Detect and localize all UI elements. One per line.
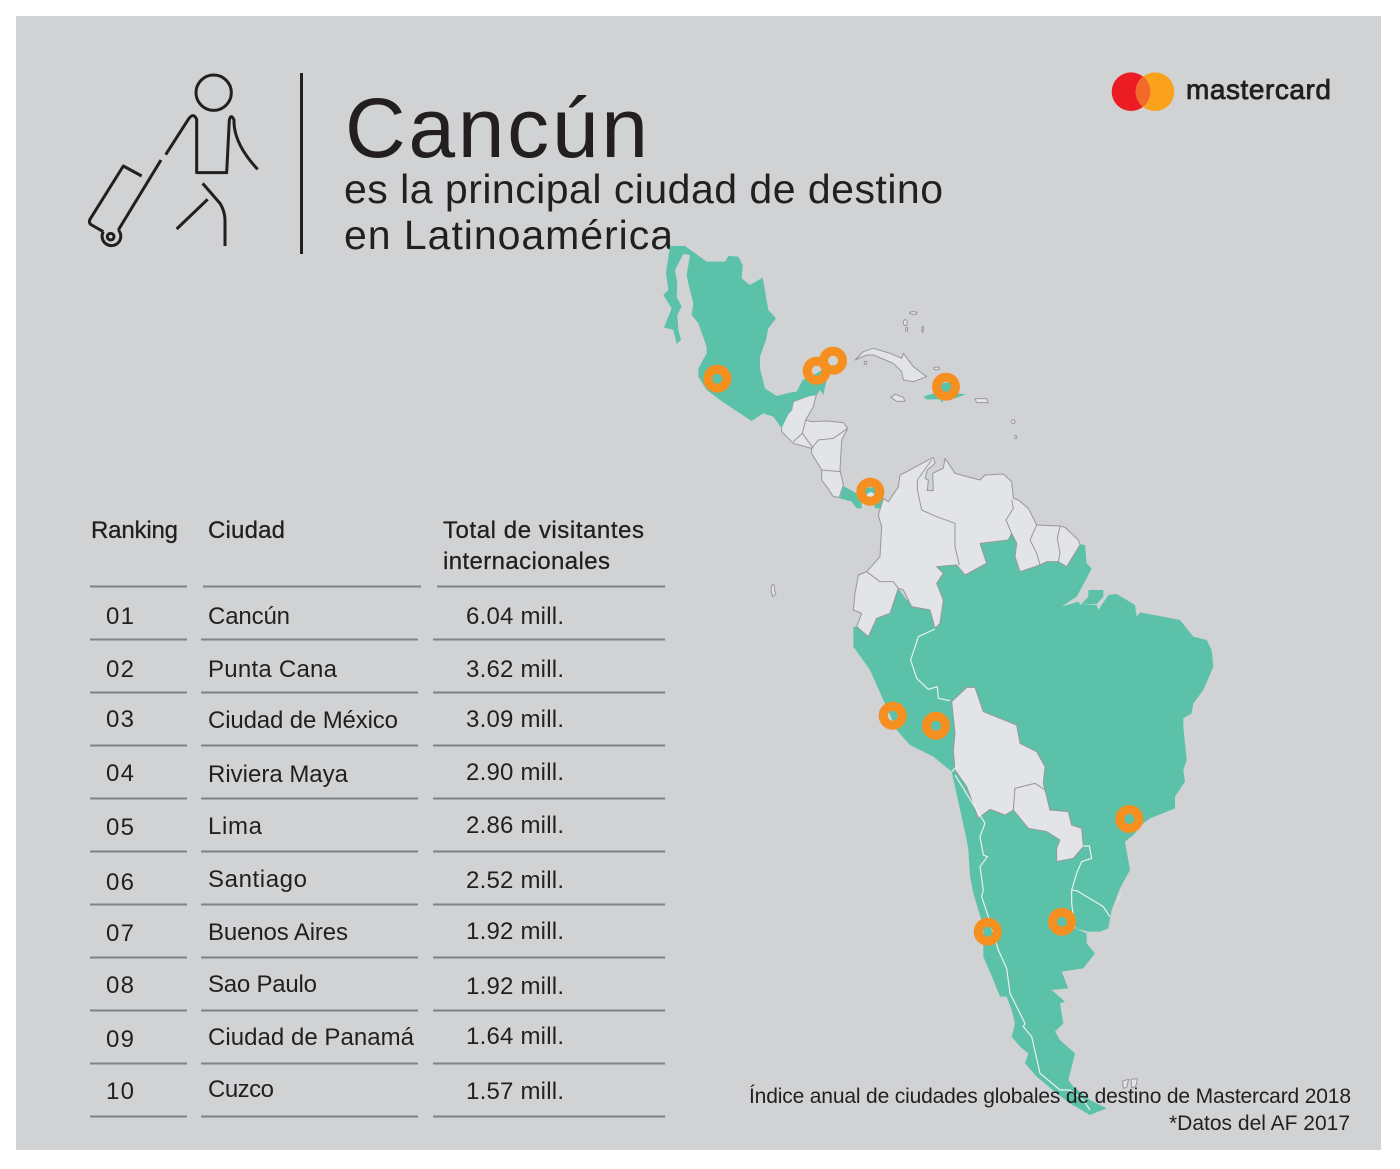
row 07: [106, 918, 564, 947]
row 01: [106, 603, 564, 630]
ring markers: [708, 351, 1139, 941]
icon: traveller pulling suitcase: [89, 75, 258, 246]
Mexico: [663, 246, 835, 428]
row 07: 1.92 mill.: [466, 918, 564, 945]
mastercard logo: [1112, 72, 1331, 111]
row 03: Ciudad de México: [208, 707, 398, 734]
Paraguay: [1013, 783, 1083, 862]
table header: Ciudad: [208, 517, 285, 544]
row 04: 04: [106, 760, 134, 787]
row 06: 06: [106, 869, 134, 896]
row 01: Cancún: [208, 603, 290, 630]
row 06: 2.52 mill.: [466, 867, 564, 894]
row 04: Riviera Maya: [208, 761, 349, 788]
row 10: [106, 1076, 564, 1105]
Cuba: [855, 348, 927, 382]
title: en Latinoamérica: [344, 212, 673, 258]
row 06: [106, 866, 564, 896]
map: South America: [853, 457, 1213, 1115]
Galapagos: [771, 585, 776, 597]
northern countries: [853, 457, 1080, 637]
country borders: [911, 629, 1110, 1110]
row 05: 05: [106, 814, 134, 841]
row 01: 01: [106, 603, 134, 630]
row 08: 1.92 mill.: [466, 973, 564, 1000]
title: Cancún: [345, 81, 648, 175]
row 09: [106, 1023, 564, 1053]
row 10: Cuzco: [208, 1076, 274, 1103]
source note: *Datos del AF 2017: [1169, 1112, 1350, 1135]
row 10: 10: [106, 1078, 134, 1105]
row 03: 3.09 mill.: [466, 706, 564, 733]
row 02: 3.62 mill.: [466, 656, 564, 683]
Dominican Republic: [923, 382, 966, 403]
row 05: [106, 812, 564, 841]
Caribbean islands: [864, 312, 1017, 439]
table: top 10 destinations: [90, 517, 665, 1116]
row 09: Ciudad de Panamá: [208, 1024, 415, 1051]
source note: [749, 1085, 1351, 1135]
Bolivia: [952, 687, 1045, 818]
table header: internacionales: [443, 548, 610, 575]
row 07: Buenos Aires: [208, 919, 348, 946]
row 08: [106, 971, 564, 1000]
row 01: 6.04 mill.: [466, 603, 564, 630]
Panama: [840, 486, 883, 508]
table rules: [90, 586, 665, 1116]
row 03: [106, 706, 564, 734]
mastercard logo: mastercard: [1186, 74, 1331, 105]
Central America: [782, 393, 848, 497]
source note: Índice anual de ciudades globales de destino de Mastercard 2018: [749, 1085, 1351, 1108]
teal countries: [853, 533, 1213, 1115]
row 02: Punta Cana: [208, 656, 338, 683]
title: es la principal ciudad de destino: [344, 166, 943, 212]
Falkland Islands: [1123, 1079, 1137, 1088]
row 10: 1.57 mill.: [466, 1078, 564, 1105]
row 07: 07: [106, 920, 134, 947]
row 08: Sao Paulo: [208, 971, 317, 998]
title divider: [300, 73, 303, 254]
table header: [91, 517, 644, 575]
title: [344, 81, 943, 258]
row 02: [106, 656, 564, 683]
map: Latin America: [663, 246, 1213, 1115]
row 05: Lima: [208, 813, 263, 840]
row 05: 2.86 mill.: [466, 812, 564, 839]
row 09: 1.64 mill.: [466, 1023, 564, 1050]
row 06: Santiago: [208, 866, 307, 893]
table header: Ranking: [91, 517, 178, 544]
row 04: [106, 759, 564, 788]
row 03: 03: [106, 706, 134, 733]
row 04: 2.90 mill.: [466, 759, 564, 786]
row 09: 09: [106, 1026, 134, 1053]
map: Mexico and Central America: [663, 246, 1017, 508]
row 08: 08: [106, 972, 134, 999]
row 02: 02: [106, 656, 134, 683]
table header: Total de visitantes: [443, 517, 644, 544]
